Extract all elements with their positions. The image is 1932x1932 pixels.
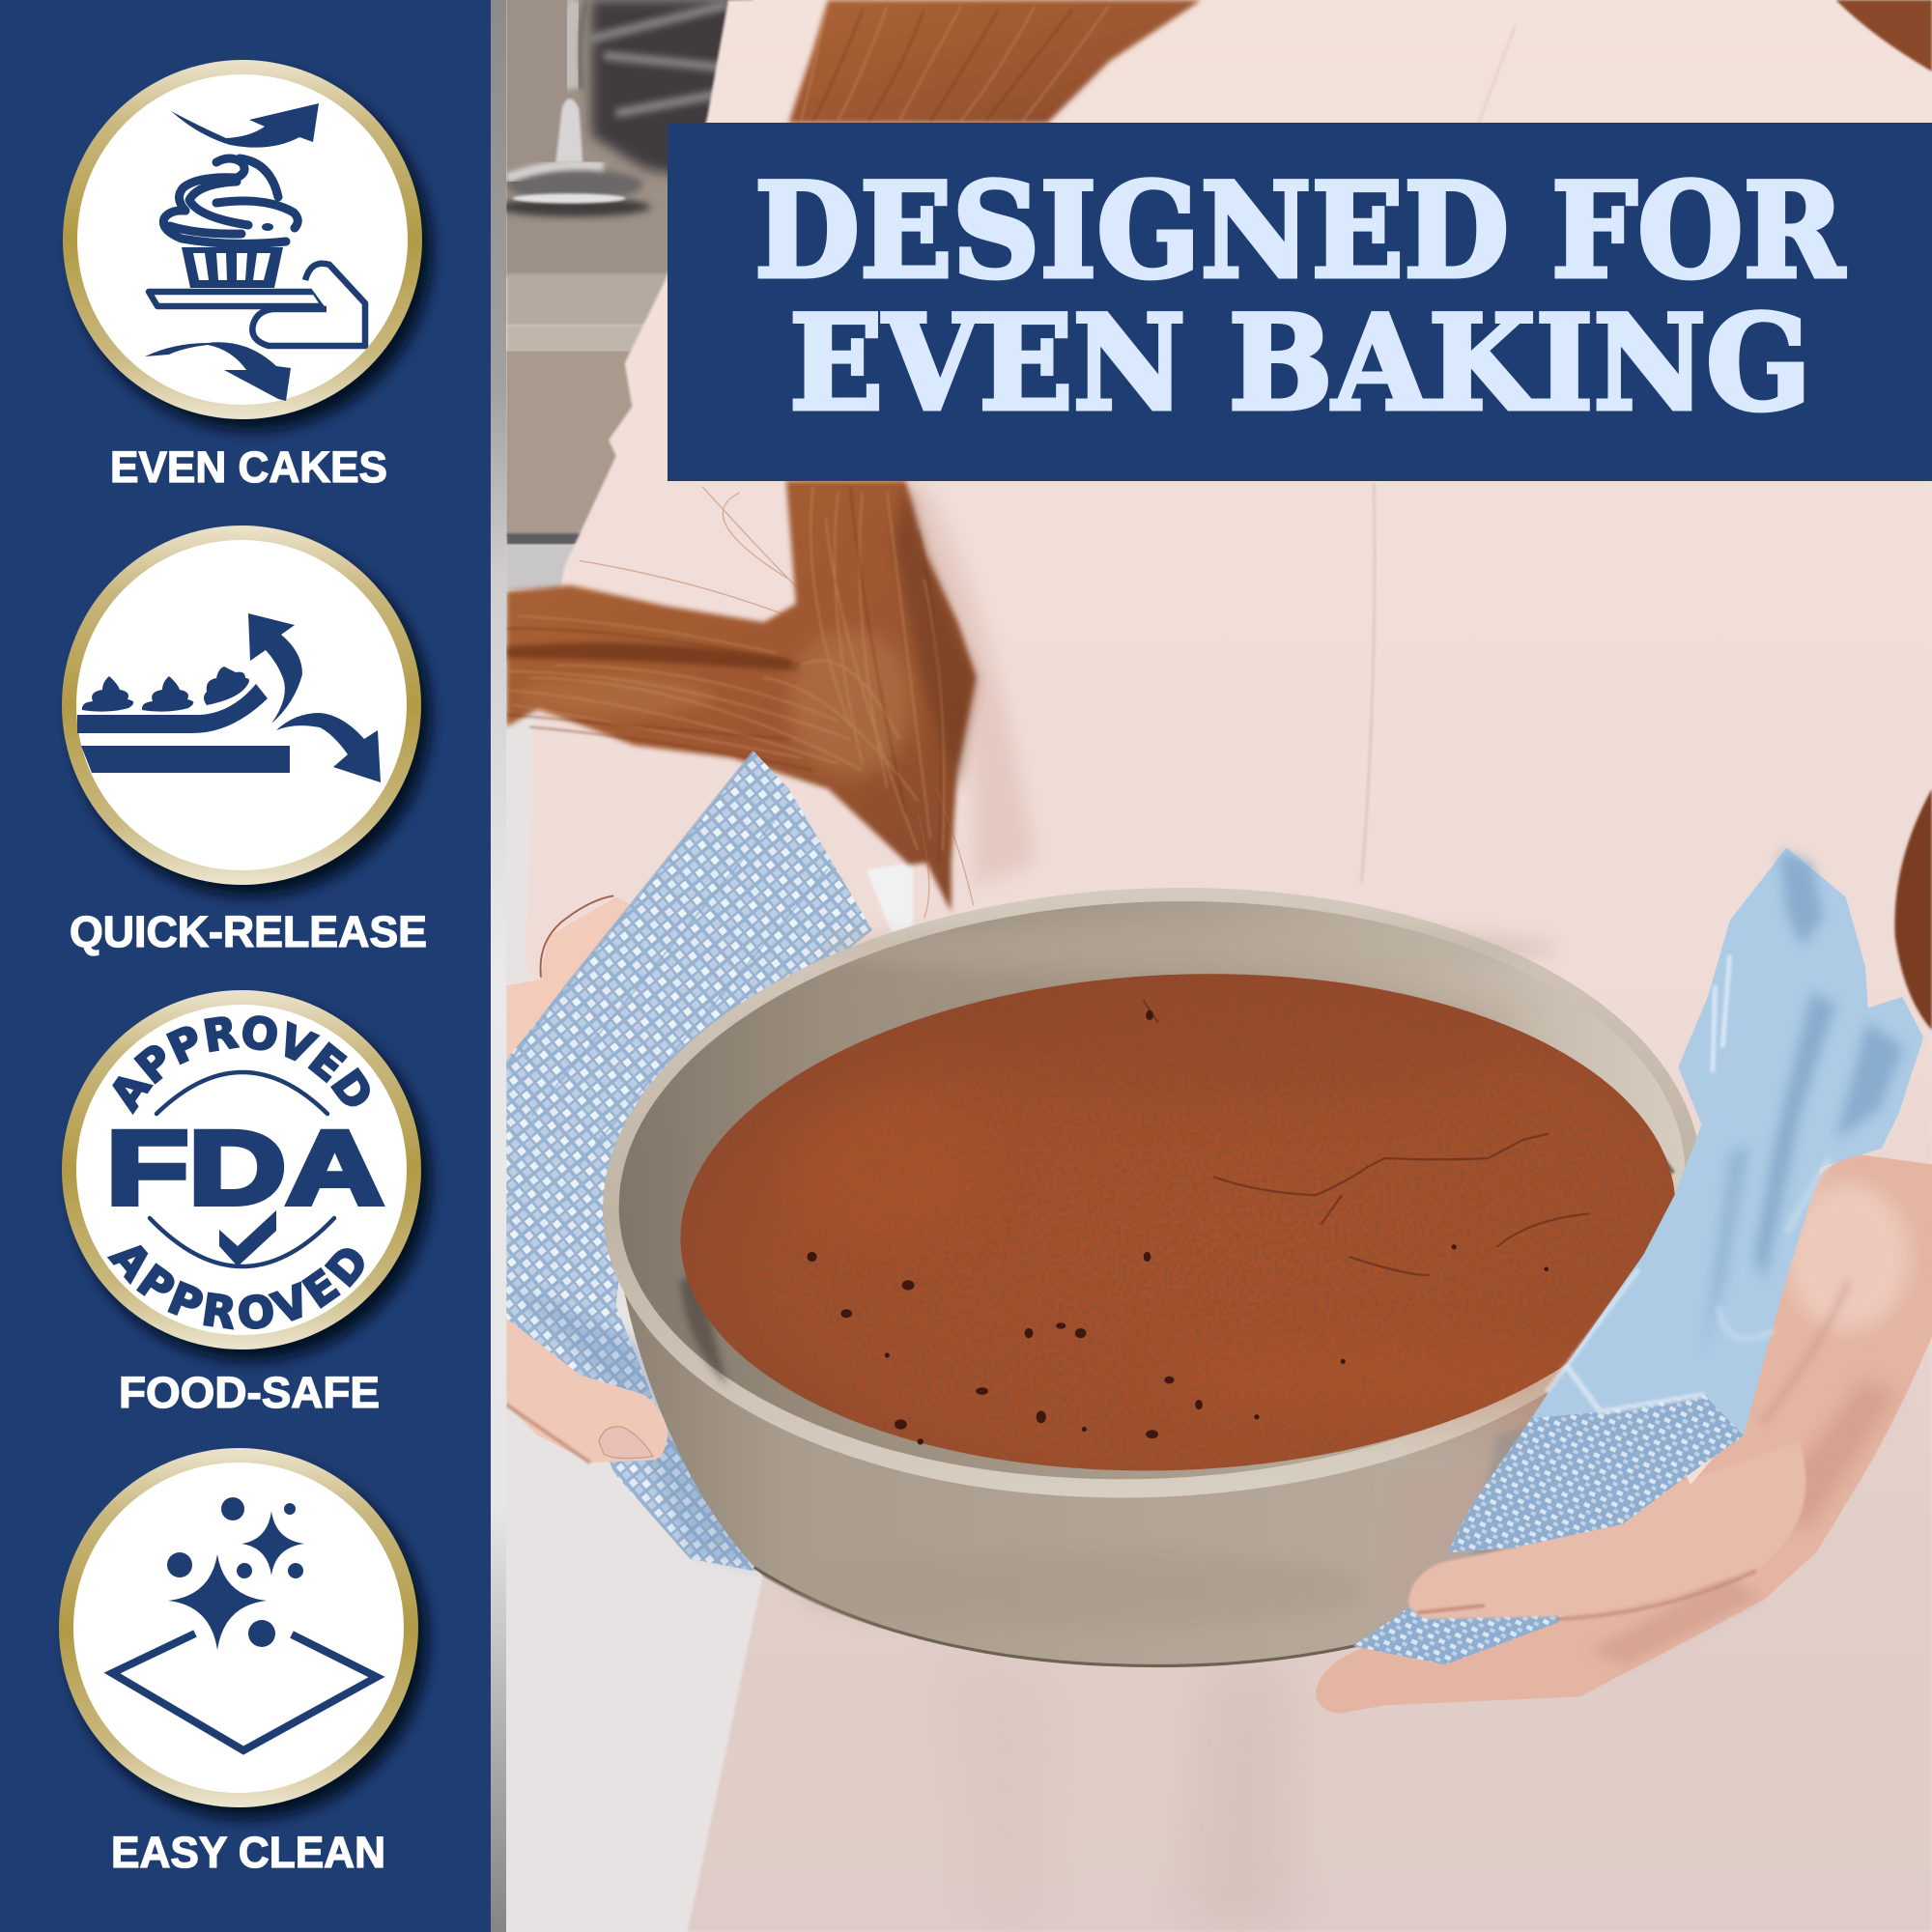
title line 2: EVEN BAKING <box>789 286 1811 440</box>
left navy feature panel <box>0 0 491 1932</box>
badge: easy clean <box>59 1448 428 1819</box>
hair <box>506 0 1932 1030</box>
label: easy clean: EASY CLEAN <box>111 1828 385 1877</box>
label: food safe: FOOD-SAFE <box>119 1368 380 1417</box>
right hand <box>1316 1154 1932 1714</box>
photo: woman holding round cake pan with baked cake <box>497 0 1932 1932</box>
left hand upper skin and cuff <box>506 895 630 1060</box>
icon: cupcake on tray with arrows <box>145 103 365 401</box>
cake top <box>669 953 1686 1492</box>
title banner <box>668 123 1932 481</box>
right index finger <box>1408 1282 1848 1619</box>
cake pan <box>590 865 1715 1665</box>
left thumb <box>506 1319 668 1463</box>
icon: check mark <box>219 1210 276 1266</box>
text: FDA: FDA <box>106 1109 384 1226</box>
icon: cake sliding off pan <box>77 613 381 782</box>
text: approved top arc: APPROVED <box>112 1015 370 1115</box>
badge: even cakes <box>63 60 432 431</box>
pan outer side wall <box>624 1293 1549 1664</box>
pink dress and sleeve <box>525 0 1932 1932</box>
badge: quick release <box>62 526 431 896</box>
icon: sparkles over clean surface <box>112 1497 377 1750</box>
pan rim <box>590 865 1715 1520</box>
right towel folded <box>1448 848 1923 1552</box>
left towel <box>506 752 872 1571</box>
label: quick release: QUICK-RELEASE <box>70 907 427 956</box>
gray divider strip <box>491 0 506 1932</box>
label: even cakes: EVEN CAKES <box>110 442 387 492</box>
text: approved bottom arc: APPROVED <box>106 1244 364 1330</box>
kitchen background <box>506 0 753 589</box>
pan inner wall <box>607 879 1697 1501</box>
title line 1: DESIGNED FOR <box>754 154 1845 307</box>
right towel lower fold <box>1352 1605 1563 1665</box>
badge: FDA approved <box>62 990 440 1370</box>
